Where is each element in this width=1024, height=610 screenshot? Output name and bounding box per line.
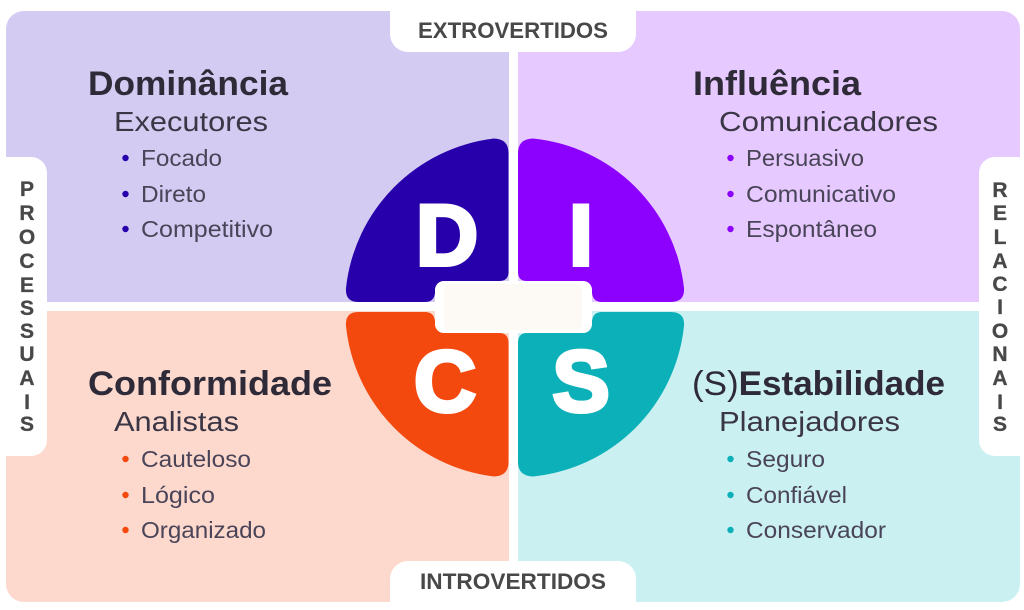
text: Conformidade: Conformidade <box>88 365 332 403</box>
panel: Dominância background <box>6 11 509 302</box>
tab: Extrovertidos: EXTROVERTIDOS <box>418 18 608 43</box>
text: Conformidade: Analistas <box>114 406 239 437</box>
quadrant: I <box>518 138 684 302</box>
text: Conformidade: Cauteloso <box>141 446 251 472</box>
tab: Processuais: P <box>20 178 34 201</box>
tab: Processuais: A <box>19 367 35 390</box>
text: Estabilidade <box>692 365 945 543</box>
tab: Relacionais: I <box>997 296 1003 319</box>
tab: Relacionais: L <box>994 226 1007 249</box>
tab: Relacionais: A <box>992 367 1008 390</box>
text: Conformidade: Lógico <box>141 482 215 508</box>
center plate <box>435 281 592 333</box>
text: Influência: Comunicativo <box>746 181 896 207</box>
text: Influência: Comunicadores <box>719 106 938 137</box>
tab: Relacionais: I <box>997 391 1003 414</box>
tab: Processuais: E <box>20 274 34 297</box>
text: Dominância: Competitivo <box>141 216 273 242</box>
text: Dominância <box>88 65 289 242</box>
text: Estabilidade: Confiável <box>746 482 847 508</box>
tab: Processuais: I <box>24 391 30 414</box>
text: Estabilidade: (S)Estabilidade <box>692 365 945 403</box>
quadrant: C: C <box>414 334 476 430</box>
panel: Estabilidade background <box>518 311 1020 602</box>
text: Dominância: Focado <box>141 145 222 171</box>
tab: Relacionais <box>979 157 1024 456</box>
tab: Processuais <box>0 157 47 456</box>
tab: Processuais: C <box>19 250 35 273</box>
text: Influência: Espontâneo <box>746 216 877 242</box>
text: Conformidade: Organizado <box>141 517 266 543</box>
tab: Introvertidos: INTROVERTIDOS <box>420 569 606 594</box>
text: Estabilidade: Seguro <box>746 446 825 472</box>
tab: Relacionais: N <box>992 343 1008 366</box>
tab: Processuais: R <box>19 202 35 225</box>
quadrant: D <box>346 138 508 302</box>
text: Dominância: Direto <box>141 181 206 207</box>
tab: Relacionais: O <box>992 320 1008 343</box>
text: Estabilidade: Conservador <box>746 517 886 543</box>
tab: Relacionais: A <box>992 250 1008 273</box>
tab: Processuais: S <box>20 320 34 343</box>
quadrant: D: D <box>416 188 478 284</box>
tab: Relacionais: C <box>992 273 1008 296</box>
quadrant: S: S <box>552 334 610 430</box>
tab: Introvertidos <box>390 561 636 610</box>
text: Estabilidade: Planejadores <box>719 406 900 437</box>
text: Conformidade <box>88 365 332 543</box>
quadrant: I: I <box>569 188 593 284</box>
text: Influência <box>693 65 938 242</box>
tab: Extrovertidos <box>390 0 636 52</box>
tab: Processuais: U <box>19 343 35 366</box>
text: Dominância: Dominância <box>88 65 289 103</box>
quadrant: S <box>518 312 684 476</box>
tab: Relacionais: S <box>993 413 1007 436</box>
text: Influência: Influência <box>693 65 862 103</box>
text: Dominância: Executores <box>114 106 268 137</box>
text: Influência: Persuasivo <box>746 145 864 171</box>
tab: Relacionais: E <box>993 202 1007 225</box>
panel: Influência background <box>518 11 1020 302</box>
tab: Processuais: O <box>19 226 35 249</box>
quadrant: C <box>346 312 508 476</box>
tab: Processuais: S <box>20 297 34 320</box>
tab: Relacionais: R <box>992 179 1008 202</box>
tab: Processuais: S <box>20 413 34 436</box>
panel: Conformidade background <box>6 311 509 602</box>
